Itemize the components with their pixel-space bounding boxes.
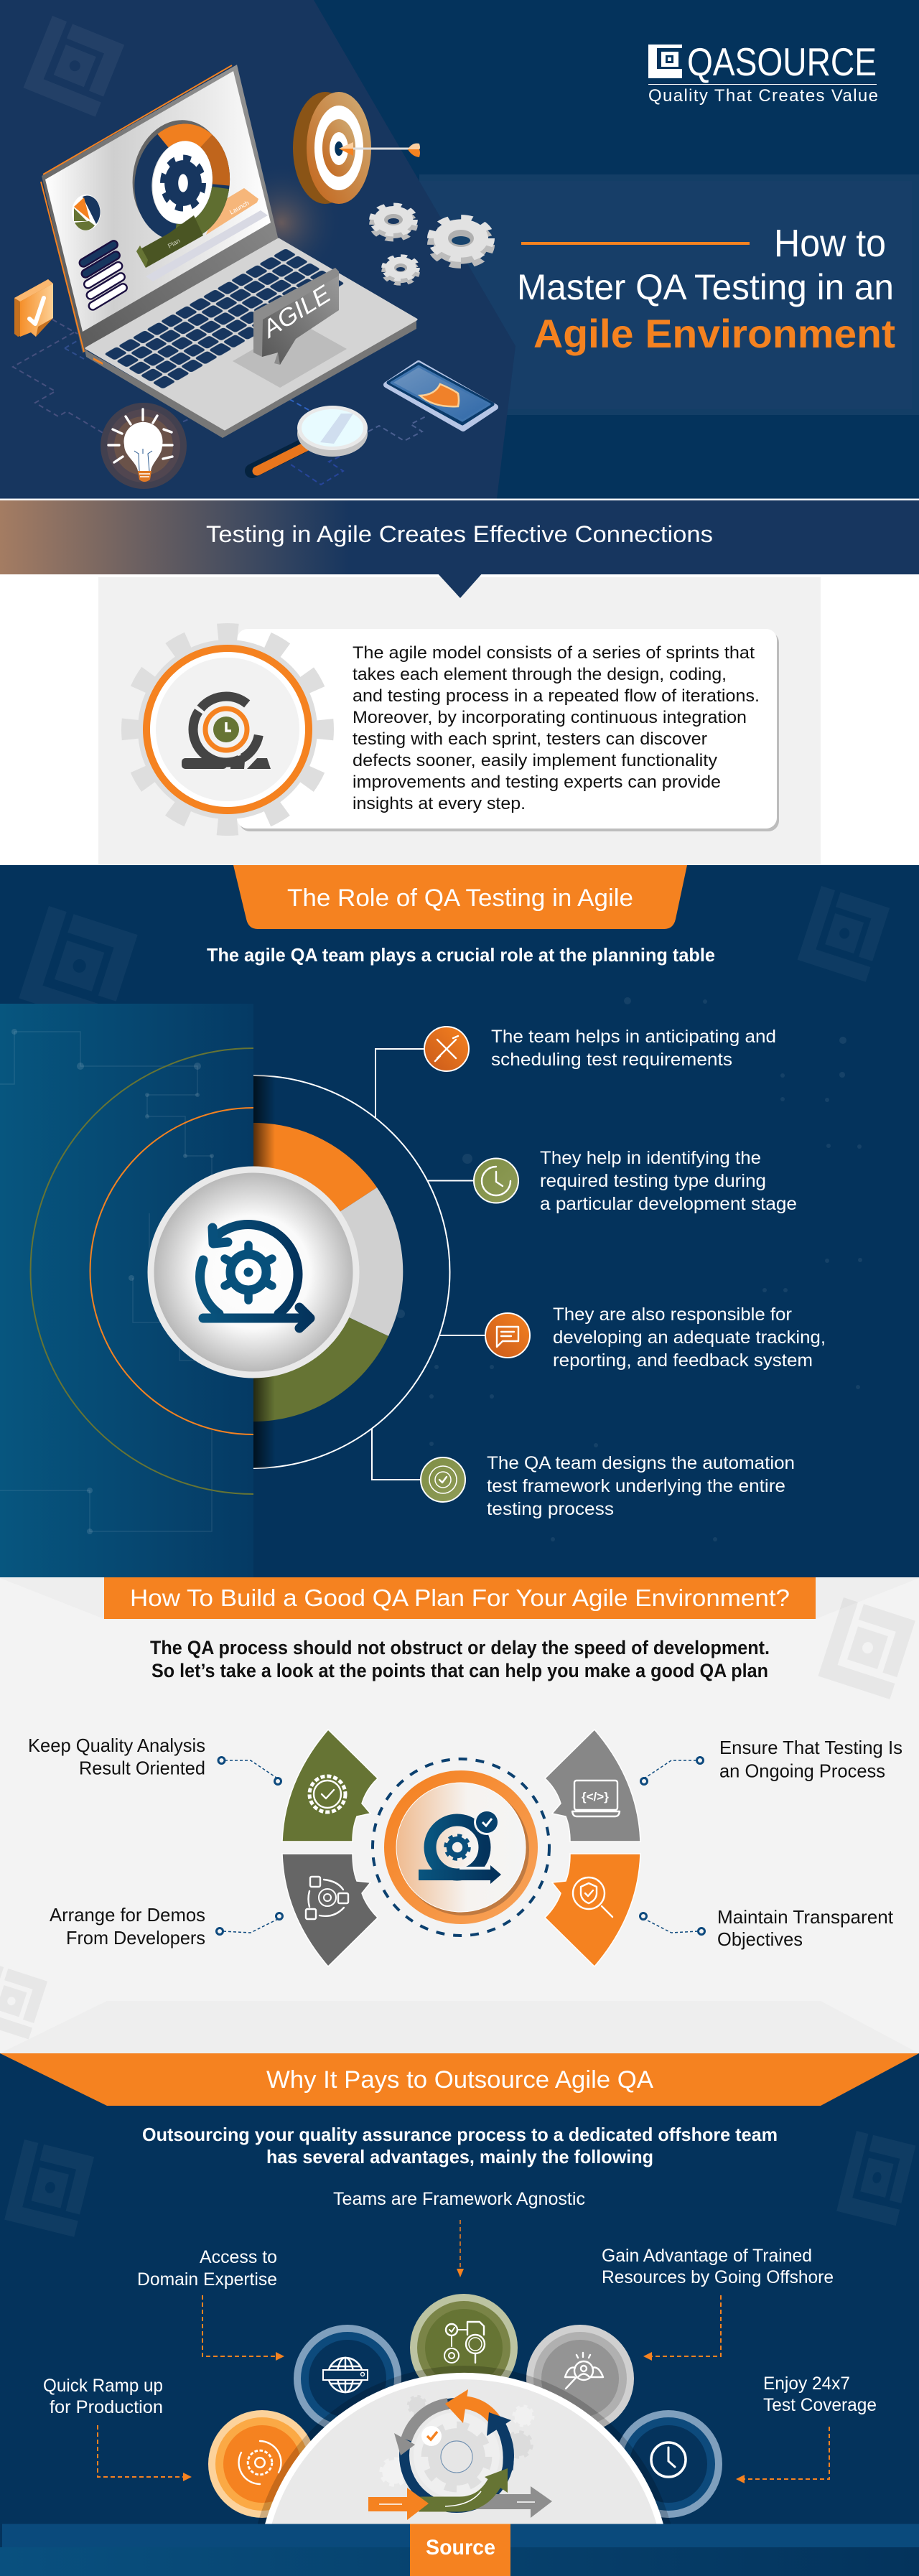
cycle graphic bbox=[368, 2389, 552, 2520]
icon: phone with shield bbox=[386, 363, 495, 429]
label: transparent objectives bbox=[717, 1906, 894, 1950]
intro band heading bbox=[0, 500, 919, 574]
laptop illustration: Plan bbox=[167, 237, 182, 250]
item: automation framework: The QA team designs the automation bbox=[487, 1453, 795, 1473]
section: build a good QA plan bbox=[0, 1577, 919, 2053]
title: How to bbox=[774, 222, 886, 265]
item: tracking system: reporting, and feedback system bbox=[553, 1350, 813, 1371]
section: role of QA testing bbox=[0, 865, 919, 1577]
item: tracking system: They are also responsible for bbox=[553, 1305, 792, 1325]
item: automation framework: test framework underlying the entire bbox=[487, 1476, 785, 1496]
arrow: domain expertise bbox=[202, 2295, 284, 2361]
icon: sprint loop bbox=[182, 696, 271, 769]
sprint ring on screen bbox=[131, 120, 228, 238]
label: ramp up: Quick Ramp up bbox=[43, 2376, 163, 2396]
panel: agile connections bbox=[98, 572, 821, 865]
label: ongoing process bbox=[719, 1737, 902, 1782]
icon: clock bbox=[651, 2442, 686, 2477]
pie chart on screen bbox=[72, 195, 101, 230]
label: quality result bbox=[28, 1735, 205, 1779]
badge: domain expertise bbox=[294, 2325, 401, 2432]
item: automation framework bbox=[421, 1453, 795, 1519]
subtitle: So let’s take a look at the points that can help you make a good QA plan bbox=[151, 1660, 768, 1681]
label: demos: Arrange for Demos bbox=[50, 1904, 205, 1926]
heading banner bbox=[104, 1577, 816, 1619]
label: transparent objectives: Objectives bbox=[717, 1928, 803, 1950]
watermark logos bbox=[4, 2131, 915, 2237]
cycle arrow: olive bbox=[419, 2478, 497, 2504]
wedge: olive bbox=[253, 1317, 388, 1422]
icon: demo cycle bbox=[306, 1877, 348, 1919]
icon: agile gear check bbox=[419, 1809, 501, 1884]
icon: people search bbox=[565, 2353, 603, 2389]
label: trained resources bbox=[602, 2246, 834, 2287]
icon: clock bbox=[474, 1159, 518, 1203]
subtitle: The QA process should not obstruct or delay the speed of development. bbox=[150, 1637, 770, 1658]
dome bbox=[258, 2366, 671, 2524]
icon: three gears bbox=[373, 205, 490, 284]
icon: code laptop bbox=[572, 1781, 620, 1816]
plan bar on screen bbox=[136, 215, 203, 268]
connector: ongoing process bbox=[640, 1758, 704, 1785]
item: test requirements: The team helps in anticipating and bbox=[491, 1027, 776, 1047]
label: test coverage: Enjoy 24x7 bbox=[763, 2374, 850, 2394]
band pointer bbox=[437, 572, 483, 598]
icon: agile cycle bbox=[200, 1224, 310, 1328]
item: test requirements: scheduling test requirements bbox=[491, 1050, 732, 1070]
label: transparent objectives: Maintain Transparent bbox=[717, 1906, 894, 1928]
item: testing type: They help in identifying the bbox=[540, 1148, 761, 1168]
connector: transparent objectives bbox=[640, 1913, 705, 1934]
cycle arrow: navy bbox=[500, 2424, 508, 2470]
item: tracking system: developing an adequate tracking, bbox=[553, 1327, 826, 1348]
title: Agile Environment bbox=[533, 311, 895, 356]
straight arrow: orange bbox=[368, 2488, 429, 2520]
gear badge bbox=[131, 633, 325, 826]
list bars on screen bbox=[78, 239, 129, 312]
text card: The agile model consists of a series of sprints that bbox=[353, 643, 755, 663]
straight arrow: grey bbox=[474, 2486, 552, 2518]
centre badge bbox=[373, 1759, 549, 1936]
arrow: ramp up bbox=[98, 2425, 192, 2481]
title bbox=[517, 222, 895, 356]
title: Master QA Testing in an bbox=[517, 267, 894, 307]
logo mark bbox=[648, 45, 682, 78]
wedge: demos bbox=[282, 1854, 378, 1966]
subtitle: The agile QA team plays a crucial role at the planning table bbox=[207, 944, 715, 966]
badge: ramp up bbox=[208, 2410, 316, 2518]
icon: light bulb bbox=[101, 403, 187, 489]
dashed circuit lines bbox=[13, 319, 426, 485]
background dots bbox=[396, 997, 862, 1541]
label: demos bbox=[50, 1904, 205, 1949]
label: ongoing process: Ensure That Testing Is bbox=[719, 1737, 902, 1758]
item: tracking system bbox=[485, 1305, 826, 1371]
label: quality result: Keep Quality Analysis bbox=[28, 1735, 205, 1756]
icon: shield magnifier bbox=[573, 1877, 612, 1917]
white orbit arc bbox=[253, 1075, 450, 1468]
laptop screen bbox=[45, 71, 271, 332]
centre disc with icon bbox=[151, 1170, 356, 1375]
icon: feedback note bbox=[485, 1313, 530, 1358]
text card: insights at every step. bbox=[353, 794, 526, 813]
left orbit arcs bbox=[30, 1048, 253, 1494]
badge: trained resources bbox=[526, 2325, 634, 2432]
touchpad bbox=[233, 322, 347, 388]
text card: and testing process in a repeated flow of iterations. bbox=[353, 686, 760, 706]
icon: framework flow bbox=[444, 2322, 485, 2363]
heading banner: How To Build a Good QA Plan For Your Agile Environment? bbox=[130, 1585, 790, 1611]
text card: takes each element through the design, coding, bbox=[353, 665, 727, 684]
item: automation framework: testing process bbox=[487, 1499, 614, 1519]
intro band heading: Testing in Agile Creates Effective Connections bbox=[206, 521, 713, 547]
subtitle bbox=[142, 2124, 778, 2167]
header section bbox=[0, 0, 919, 498]
text card: improvements and testing experts can provide bbox=[353, 773, 721, 792]
left panel bbox=[0, 1004, 253, 1577]
icon: rosette check bbox=[309, 1776, 345, 1812]
cycle arrow: orange bbox=[460, 2402, 495, 2421]
arrow: trained resources bbox=[643, 2295, 721, 2361]
heading banner bbox=[0, 2053, 919, 2106]
source button: Source bbox=[426, 2536, 495, 2559]
laptop illustration bbox=[41, 65, 416, 438]
icon: code laptop: {</>} bbox=[582, 1790, 609, 1803]
heading banner: Why It Pays to Outsource Agile QA bbox=[266, 2066, 653, 2094]
wedge: transparent objectives bbox=[545, 1854, 640, 1966]
label: demos: From Developers bbox=[66, 1927, 205, 1949]
label: trained resources: Gain Advantage of Trained bbox=[602, 2246, 812, 2266]
watermark logos bbox=[19, 886, 890, 1027]
laptop lid bbox=[42, 65, 279, 353]
laptop glow bbox=[220, 162, 342, 284]
item: test requirements bbox=[424, 1027, 776, 1071]
icon: automation gear bbox=[421, 1457, 465, 1502]
label: framework agnostic: Teams are Framework Agnostic bbox=[333, 2189, 585, 2209]
label: domain expertise: Domain Expertise bbox=[137, 2269, 277, 2290]
wedge: quality result bbox=[282, 1730, 378, 1842]
laptop illustration: Launch bbox=[228, 199, 251, 216]
faint background gears bbox=[381, 2397, 533, 2485]
panel shadow bbox=[253, 1075, 275, 1468]
label: ramp up: for Production bbox=[50, 2397, 163, 2417]
label: trained resources: Resources by Going Offshore bbox=[602, 2267, 834, 2287]
item: testing type: required testing type during bbox=[540, 1171, 766, 1191]
item: testing type: a particular development stage bbox=[540, 1194, 797, 1214]
watermark logos bbox=[0, 1597, 915, 2040]
logo tagline: Quality That Creates Value bbox=[648, 86, 878, 106]
connector: demos bbox=[217, 1913, 283, 1934]
bottom band bbox=[0, 2524, 919, 2576]
slanted left panel bbox=[0, 0, 516, 498]
arrow: framework agnostic bbox=[457, 2220, 464, 2277]
icon: check bubble bbox=[14, 279, 53, 337]
heading tab bbox=[233, 865, 687, 929]
text card: defects sooner, easily implement functionality bbox=[353, 751, 717, 770]
section: outsource agile QA bbox=[0, 2053, 919, 2576]
launch and base bars on screen bbox=[146, 210, 268, 281]
text card: testing with each sprint, testers can discover bbox=[353, 729, 707, 749]
label: test coverage bbox=[763, 2374, 877, 2415]
label: ongoing process: an Ongoing Process bbox=[719, 1760, 885, 1782]
arrow: test coverage bbox=[736, 2427, 829, 2483]
badge: test coverage bbox=[615, 2410, 722, 2518]
label: quality result: Result Oriented bbox=[79, 1758, 205, 1779]
title backing panel bbox=[419, 174, 919, 415]
badge: framework agnostic bbox=[410, 2294, 518, 2402]
source button bbox=[410, 2524, 510, 2576]
side port bbox=[93, 358, 103, 365]
watermark logo bbox=[24, 16, 124, 117]
circuit lines bbox=[0, 1032, 219, 1531]
label: test coverage: Test Coverage bbox=[763, 2395, 877, 2415]
icon: magnifying glass bbox=[252, 406, 368, 471]
label: domain expertise bbox=[137, 2247, 277, 2290]
icon: gear cycle bbox=[239, 2441, 281, 2484]
text card: Moreover, by incorporating continuous integration bbox=[353, 708, 747, 727]
check bubble bbox=[421, 2426, 442, 2446]
heading tab: The Role of QA Testing in Agile bbox=[287, 885, 633, 912]
keyboard bbox=[103, 248, 346, 390]
connector lines bbox=[372, 1049, 485, 1480]
wedge: grey bbox=[340, 1187, 403, 1336]
connector: quality result bbox=[218, 1758, 281, 1785]
wedge: orange bbox=[253, 1123, 377, 1212]
subtitle bbox=[150, 1637, 770, 1681]
AGILE speech bubble: AGILE bbox=[256, 280, 336, 344]
gear on screen bbox=[164, 159, 202, 207]
subtitle: has several advantages, mainly the following bbox=[266, 2146, 653, 2167]
item: testing type bbox=[474, 1148, 797, 1214]
text card bbox=[237, 629, 779, 831]
icon: target with arrow bbox=[293, 92, 420, 204]
subtitle: Outsourcing your quality assurance process to a dedicated offshore team bbox=[142, 2124, 778, 2145]
background corner shapes bbox=[0, 1578, 919, 2053]
cycle arrow: grey bbox=[406, 2404, 448, 2440]
logo bbox=[648, 39, 878, 106]
label: domain expertise: Access to bbox=[200, 2247, 277, 2267]
icon: tools bbox=[424, 1027, 469, 1071]
icon: globe search bbox=[323, 2358, 368, 2392]
wedge: ongoing process bbox=[545, 1730, 640, 1842]
laptop base bbox=[85, 319, 416, 438]
logo wordmark: QASOURCE bbox=[687, 39, 877, 84]
AGILE speech bubble bbox=[253, 268, 339, 365]
label: ramp up bbox=[43, 2376, 163, 2417]
